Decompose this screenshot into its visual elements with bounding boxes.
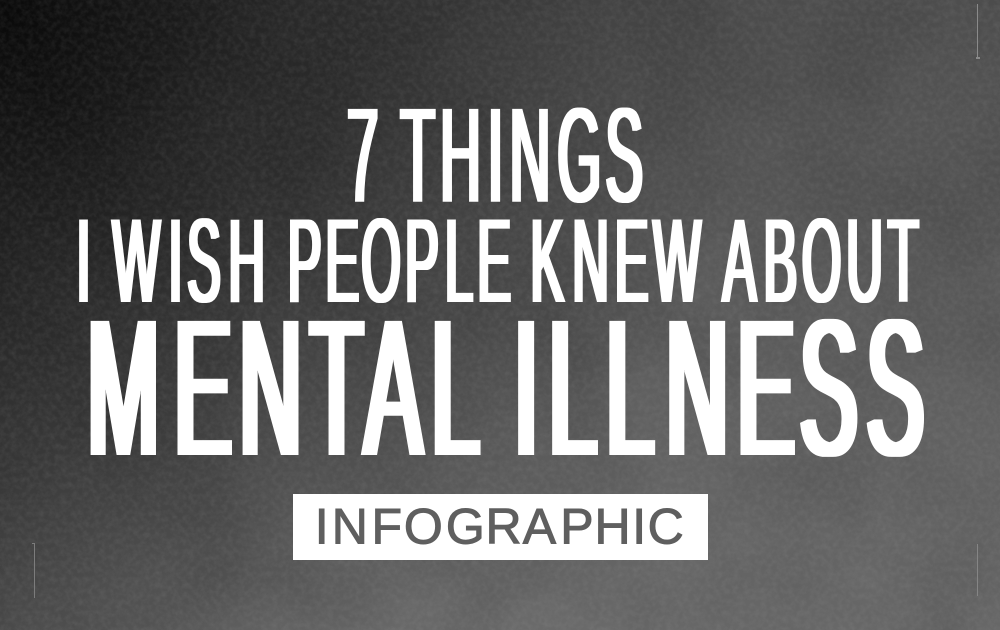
crop mark: bottom left [32, 543, 35, 598]
crop mark: top right [976, 4, 980, 59]
title line 2: I WISH PEOPLE KNEW ABOUT [76, 194, 919, 328]
title line 3: emphasis: MENTAL ILLNESS [88, 279, 924, 496]
crop mark: bottom right [977, 544, 978, 596]
title line 1: 7 THINGS [347, 79, 643, 230]
label box: infographic: INFOGRAPHIC [315, 498, 684, 554]
